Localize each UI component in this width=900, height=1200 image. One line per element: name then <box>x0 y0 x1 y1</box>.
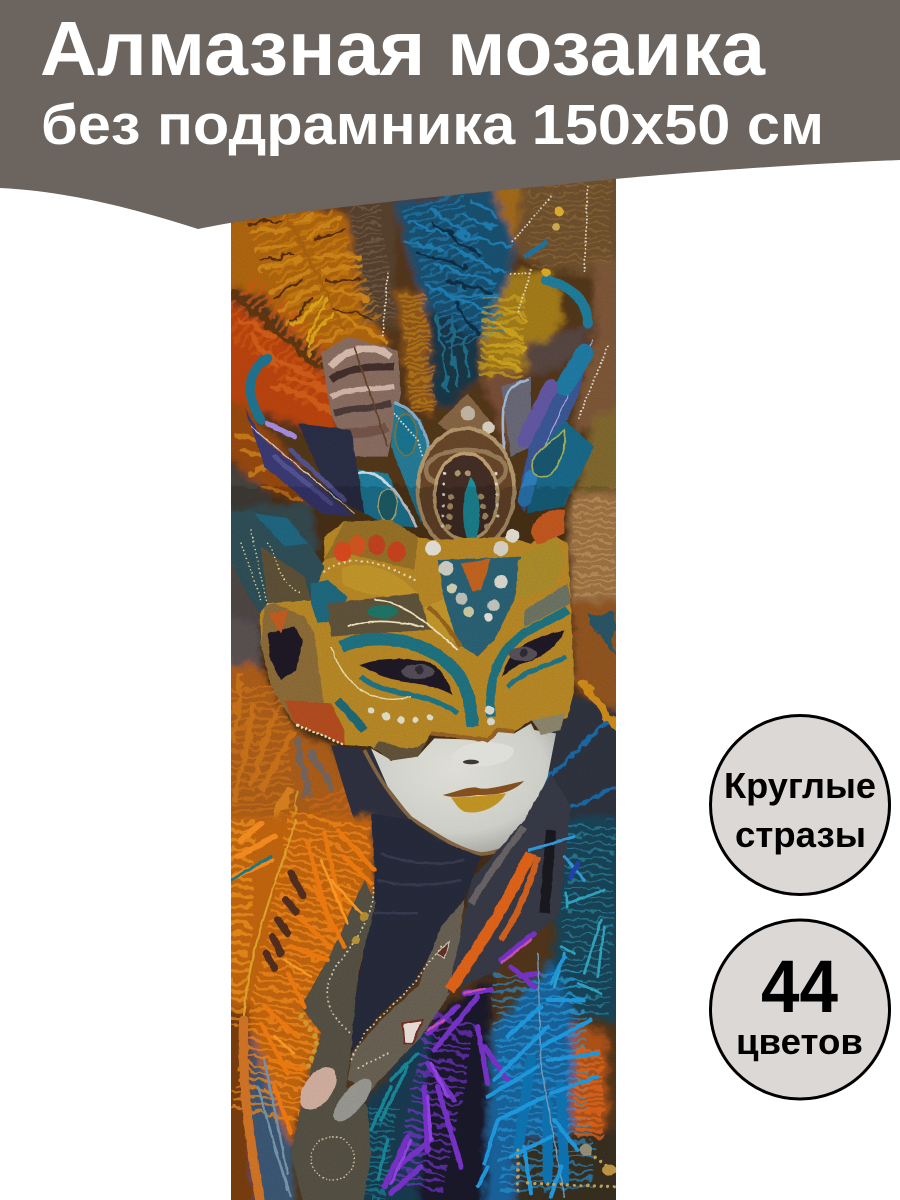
orange feather strands <box>231 820 374 1200</box>
lips <box>443 781 524 813</box>
lower feathers and collar <box>218 817 631 1200</box>
panel: carnival mask artwork <box>231 178 616 1200</box>
shading over lower background <box>231 483 616 908</box>
striped brown feather <box>321 337 401 457</box>
oval cabochons <box>300 1067 372 1122</box>
upper feathers <box>231 179 616 602</box>
collar and foreground feathers <box>231 773 617 1200</box>
headdress ornaments <box>244 187 608 552</box>
blue-purple plumes and teal leaves <box>244 280 594 527</box>
mask face <box>371 723 556 853</box>
badge: round rhinestones <box>710 716 890 894</box>
embroidered collar <box>291 880 464 1200</box>
lower mask trim <box>374 740 428 761</box>
lower background feathers <box>231 483 616 908</box>
badge text: цветов: цветов <box>736 1021 863 1062</box>
black scarf <box>351 813 481 1053</box>
mask <box>231 483 616 908</box>
title: Алмазная мозаика <box>40 6 766 92</box>
dark and orange feather cluster <box>448 773 584 993</box>
subtitle: без подрамника 150х50 см <box>41 93 824 157</box>
blue strands <box>371 953 617 1197</box>
gold mask body <box>228 509 574 761</box>
orange feather barbs <box>231 217 388 500</box>
header banner <box>0 0 900 229</box>
teal bands <box>341 639 473 727</box>
scarf <box>331 745 481 883</box>
dense feather barbs <box>238 173 608 593</box>
badge text: Круглые: Круглые <box>724 765 876 806</box>
bead lines <box>383 187 608 473</box>
shading over feathers <box>231 179 616 600</box>
badge: 44 colours <box>710 920 890 1099</box>
eye openings <box>359 659 453 695</box>
badge text: стразы: стразы <box>735 814 866 855</box>
number 44: 44 <box>761 945 838 1028</box>
gems and pearls <box>334 542 351 562</box>
purple strands <box>384 933 538 1193</box>
blue feather <box>404 200 524 393</box>
headdress medallion <box>418 393 514 552</box>
teal strands right <box>554 863 604 993</box>
